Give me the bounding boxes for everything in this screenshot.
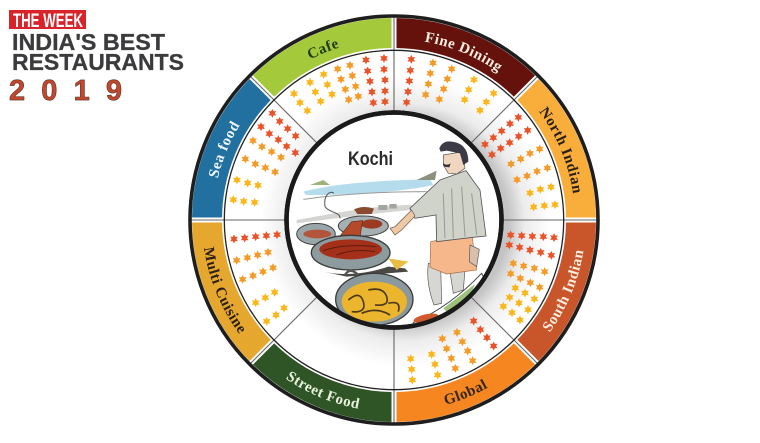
city name: Kochi <box>348 149 393 170</box>
band: Cafe <box>262 33 394 88</box>
band: Street Food <box>262 352 394 407</box>
face <box>443 152 465 174</box>
shirt <box>410 171 486 242</box>
lungi <box>430 233 477 274</box>
header: India's Best Restaurants 2019 <box>9 10 184 107</box>
hair <box>439 141 468 165</box>
left pan <box>297 223 335 245</box>
label: Sea food: Sea food <box>209 120 240 178</box>
stars: South Indian <box>499 230 558 324</box>
stars: Sea food <box>229 109 300 207</box>
band: Fine Dining <box>394 33 526 88</box>
front pan with yellow curry <box>336 271 413 325</box>
heading: INDIA'S BEST <box>12 29 165 55</box>
year: 2019 <box>9 75 122 107</box>
label: South Indian: South Indian <box>543 250 584 332</box>
stars: Multi Cuisine <box>230 230 288 326</box>
middle pan with red curry <box>311 235 408 277</box>
forearm and hands <box>390 210 415 235</box>
circular restaurant wheel <box>188 14 600 426</box>
band: South Indian <box>526 220 581 352</box>
The Week logo: THE WEEK <box>13 11 83 32</box>
band: Multi Cuisine <box>207 220 262 352</box>
legs <box>428 263 465 305</box>
illustration: Kochi street food vendor <box>297 141 486 330</box>
label: Multi Cuisine: Multi Cuisine <box>204 246 244 334</box>
side plate <box>412 272 484 324</box>
label: North Indian: North Indian <box>539 106 580 194</box>
wheel background <box>224 50 564 390</box>
stars: Cafe <box>290 54 389 115</box>
label: Global: Global <box>444 378 488 404</box>
band: North Indian <box>526 88 581 220</box>
stars: North Indian <box>481 113 559 211</box>
stars: Global <box>407 317 498 384</box>
back pan <box>338 216 389 236</box>
band: Sea food <box>207 88 262 220</box>
The Week logo <box>9 10 86 32</box>
heading: RESTAURANTS <box>12 49 184 75</box>
backwater scene <box>297 171 437 223</box>
man <box>390 141 486 305</box>
central medallion <box>286 112 502 330</box>
infographic <box>9 10 600 426</box>
label: Cafe: Cafe <box>308 40 339 58</box>
heading <box>12 29 184 75</box>
band: Global <box>394 352 526 407</box>
label: Street Food: Street Food <box>286 372 360 409</box>
label: Fine Dining: Fine Dining <box>424 32 502 74</box>
stars: Fine Dining <box>403 55 498 115</box>
